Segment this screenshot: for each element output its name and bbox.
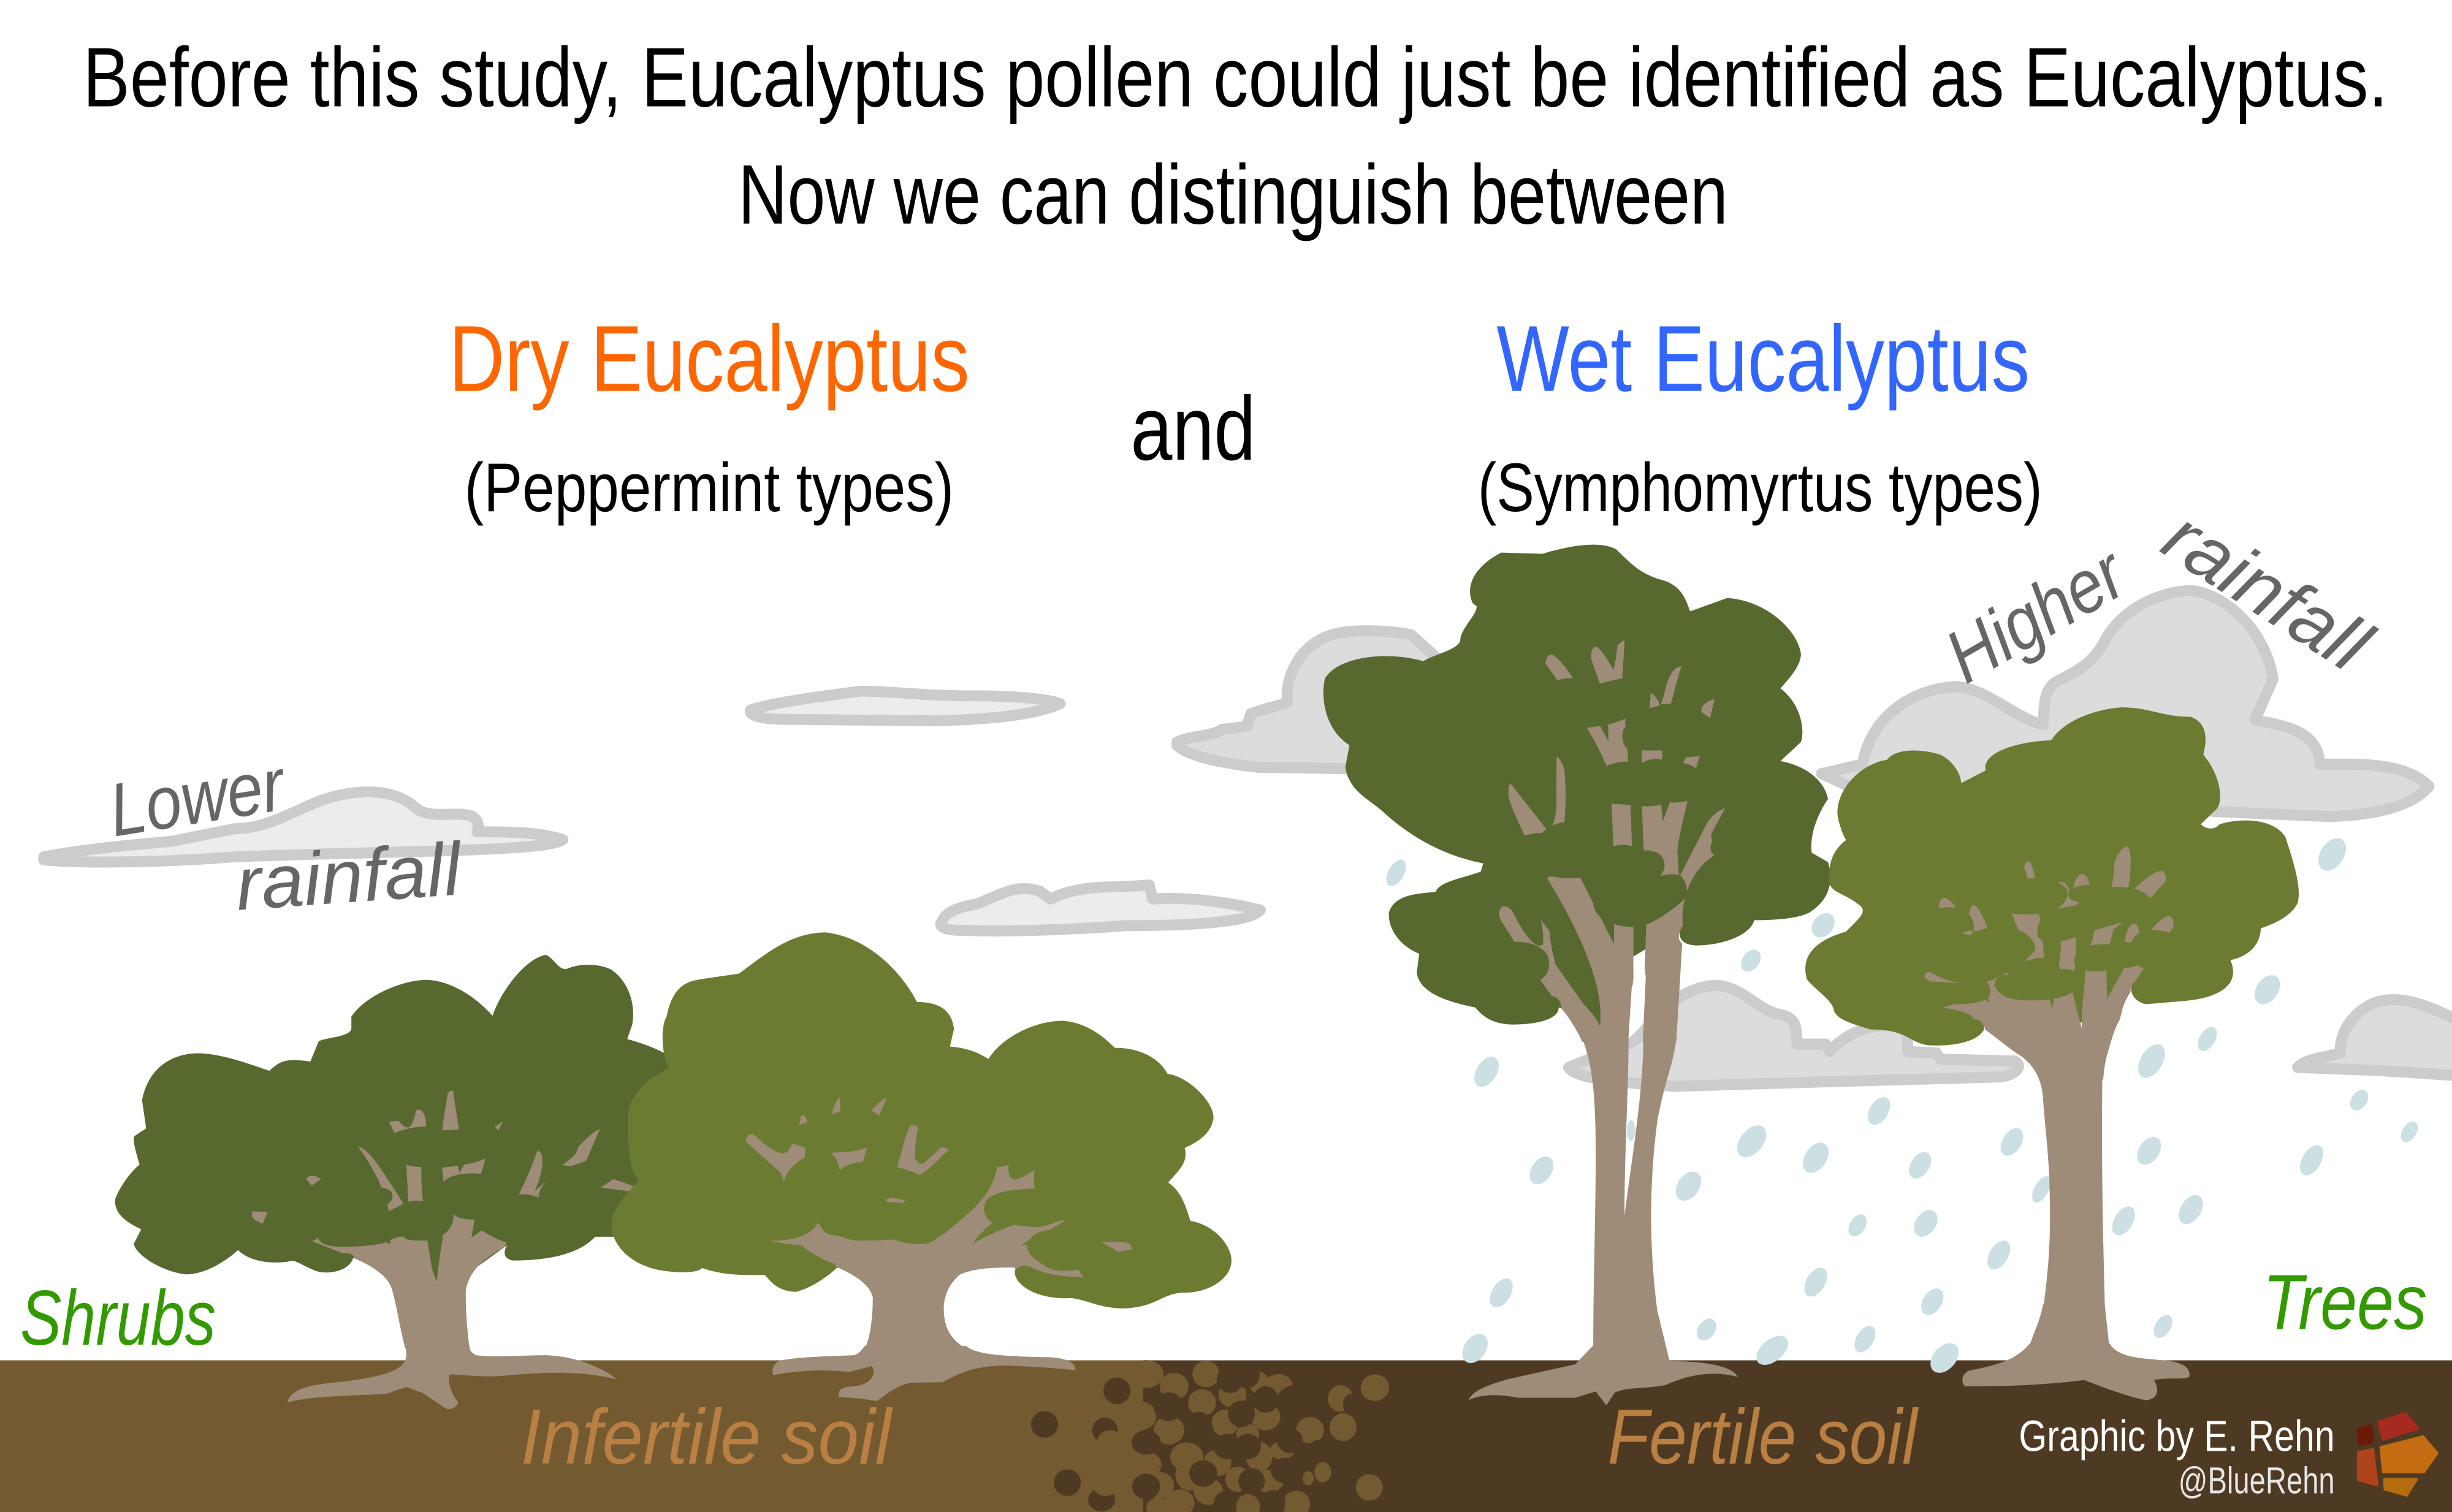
logo: rock mark <box>2358 1413 2437 1495</box>
heading: wet eucalyptus: Wet Eucalyptus <box>1496 306 2030 411</box>
label: higher rainfall: Higher <box>1932 530 2141 699</box>
label: higher rainfall <box>1932 493 2386 699</box>
cloud: small lower middle <box>941 885 1260 931</box>
label: lower rainfall: rainfall <box>233 826 465 926</box>
cloud: behind tall tree <box>1177 631 1436 770</box>
subheading: peppermint types: (Peppermint types) <box>465 449 954 526</box>
tree: light green wet eucalyptus <box>1805 707 2299 1400</box>
tree: tall dark green wet eucalyptus <box>1323 545 1830 1405</box>
cloud: small top middle <box>750 691 1060 721</box>
credit: graphic by: Graphic by E. Rehn <box>2019 1412 2335 1461</box>
shrub: light green dry eucalyptus <box>612 932 1232 1401</box>
cloud: between trees <box>1569 986 2019 1087</box>
wet side clouds <box>1177 590 2452 1087</box>
heading: dry eucalyptus: Dry Eucalyptus <box>449 306 970 411</box>
rain drops <box>1382 835 2421 1377</box>
connector word: and: and <box>1130 378 1255 479</box>
title: second line: Now we can distinguish between <box>738 148 1728 242</box>
shrub: dark green dry eucalyptus <box>115 955 706 1410</box>
credit: handle: @BlueRehn <box>2179 1459 2335 1501</box>
cloud: large higher rainfall <box>1821 590 2429 816</box>
label: lower rainfall: Lower <box>104 742 292 853</box>
cloud: right edge <box>2298 1000 2452 1076</box>
cloud: lower rainfall left <box>44 792 563 862</box>
subheading: symphomyrtus types: (Symphomyrtus types) <box>1478 449 2043 526</box>
label: trees: Trees <box>2263 1259 2427 1347</box>
label: infertile soil: Infertile soil <box>520 1394 894 1481</box>
label: shrubs: Shrubs <box>20 1275 216 1362</box>
ground: infertile and fertile soil <box>0 1360 2452 1512</box>
label: fertile soil: Fertile soil <box>1607 1394 1919 1481</box>
soil transition dots <box>1031 1360 1389 1512</box>
label: higher rainfall: rainfall <box>2149 493 2386 688</box>
label: lower rainfall <box>104 742 465 926</box>
